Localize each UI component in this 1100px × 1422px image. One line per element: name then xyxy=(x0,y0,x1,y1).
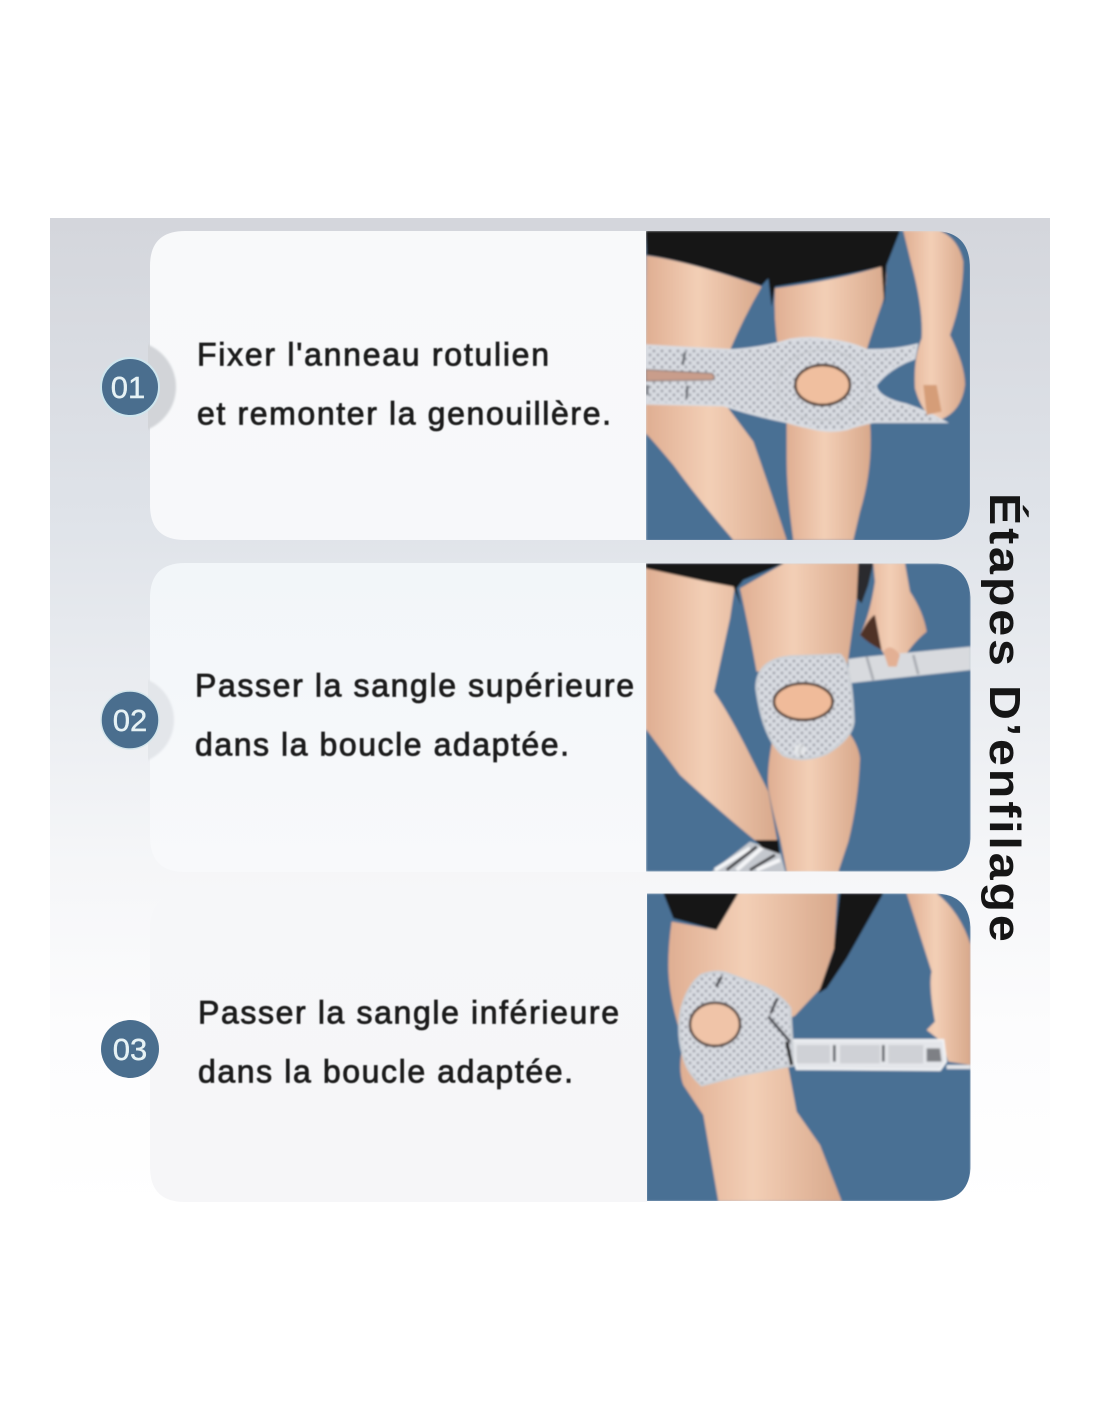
badge: 01: 01 xyxy=(111,370,145,405)
vertical title: Étapes D’enfilage xyxy=(980,493,1030,942)
card: step 1 xyxy=(150,231,646,540)
text: step 2: dans la boucle adaptée. xyxy=(195,726,569,762)
panel: step 2 xyxy=(86,563,971,872)
text: step 3: dans la boucle adaptée. xyxy=(198,1054,573,1090)
text: step 2: Passer la sangle supérieure xyxy=(195,668,634,704)
badge: 02: 02 xyxy=(113,703,147,738)
badge: 03: 03 xyxy=(113,1032,147,1067)
card: step 2 xyxy=(150,563,646,872)
photo: threading the upper strap xyxy=(646,563,971,872)
card notch: step 2 xyxy=(148,681,174,759)
panel: step 1 xyxy=(84,231,971,541)
badge: 03 xyxy=(101,1020,159,1078)
photo: threading the lower strap xyxy=(646,893,971,1202)
background panel xyxy=(50,218,1050,1210)
text: step 3: Passer la sangle inférieure xyxy=(198,994,619,1030)
badge: 01 xyxy=(101,358,159,416)
text: step 2 xyxy=(195,668,634,762)
card: step 3 xyxy=(150,894,647,1202)
card notch: step 1 xyxy=(148,345,177,429)
text: step 3 xyxy=(198,994,619,1090)
badge: 02 xyxy=(101,691,159,749)
panel: step 3 xyxy=(101,893,971,1202)
text: step 1: et remonter la genouillère. xyxy=(197,396,611,432)
infographic: threading steps xyxy=(50,218,1050,1202)
text: step 1: Fixer l'anneau rotulien xyxy=(197,336,549,372)
text: step 1 xyxy=(197,336,611,432)
photo: fixing the patella ring xyxy=(646,231,971,541)
